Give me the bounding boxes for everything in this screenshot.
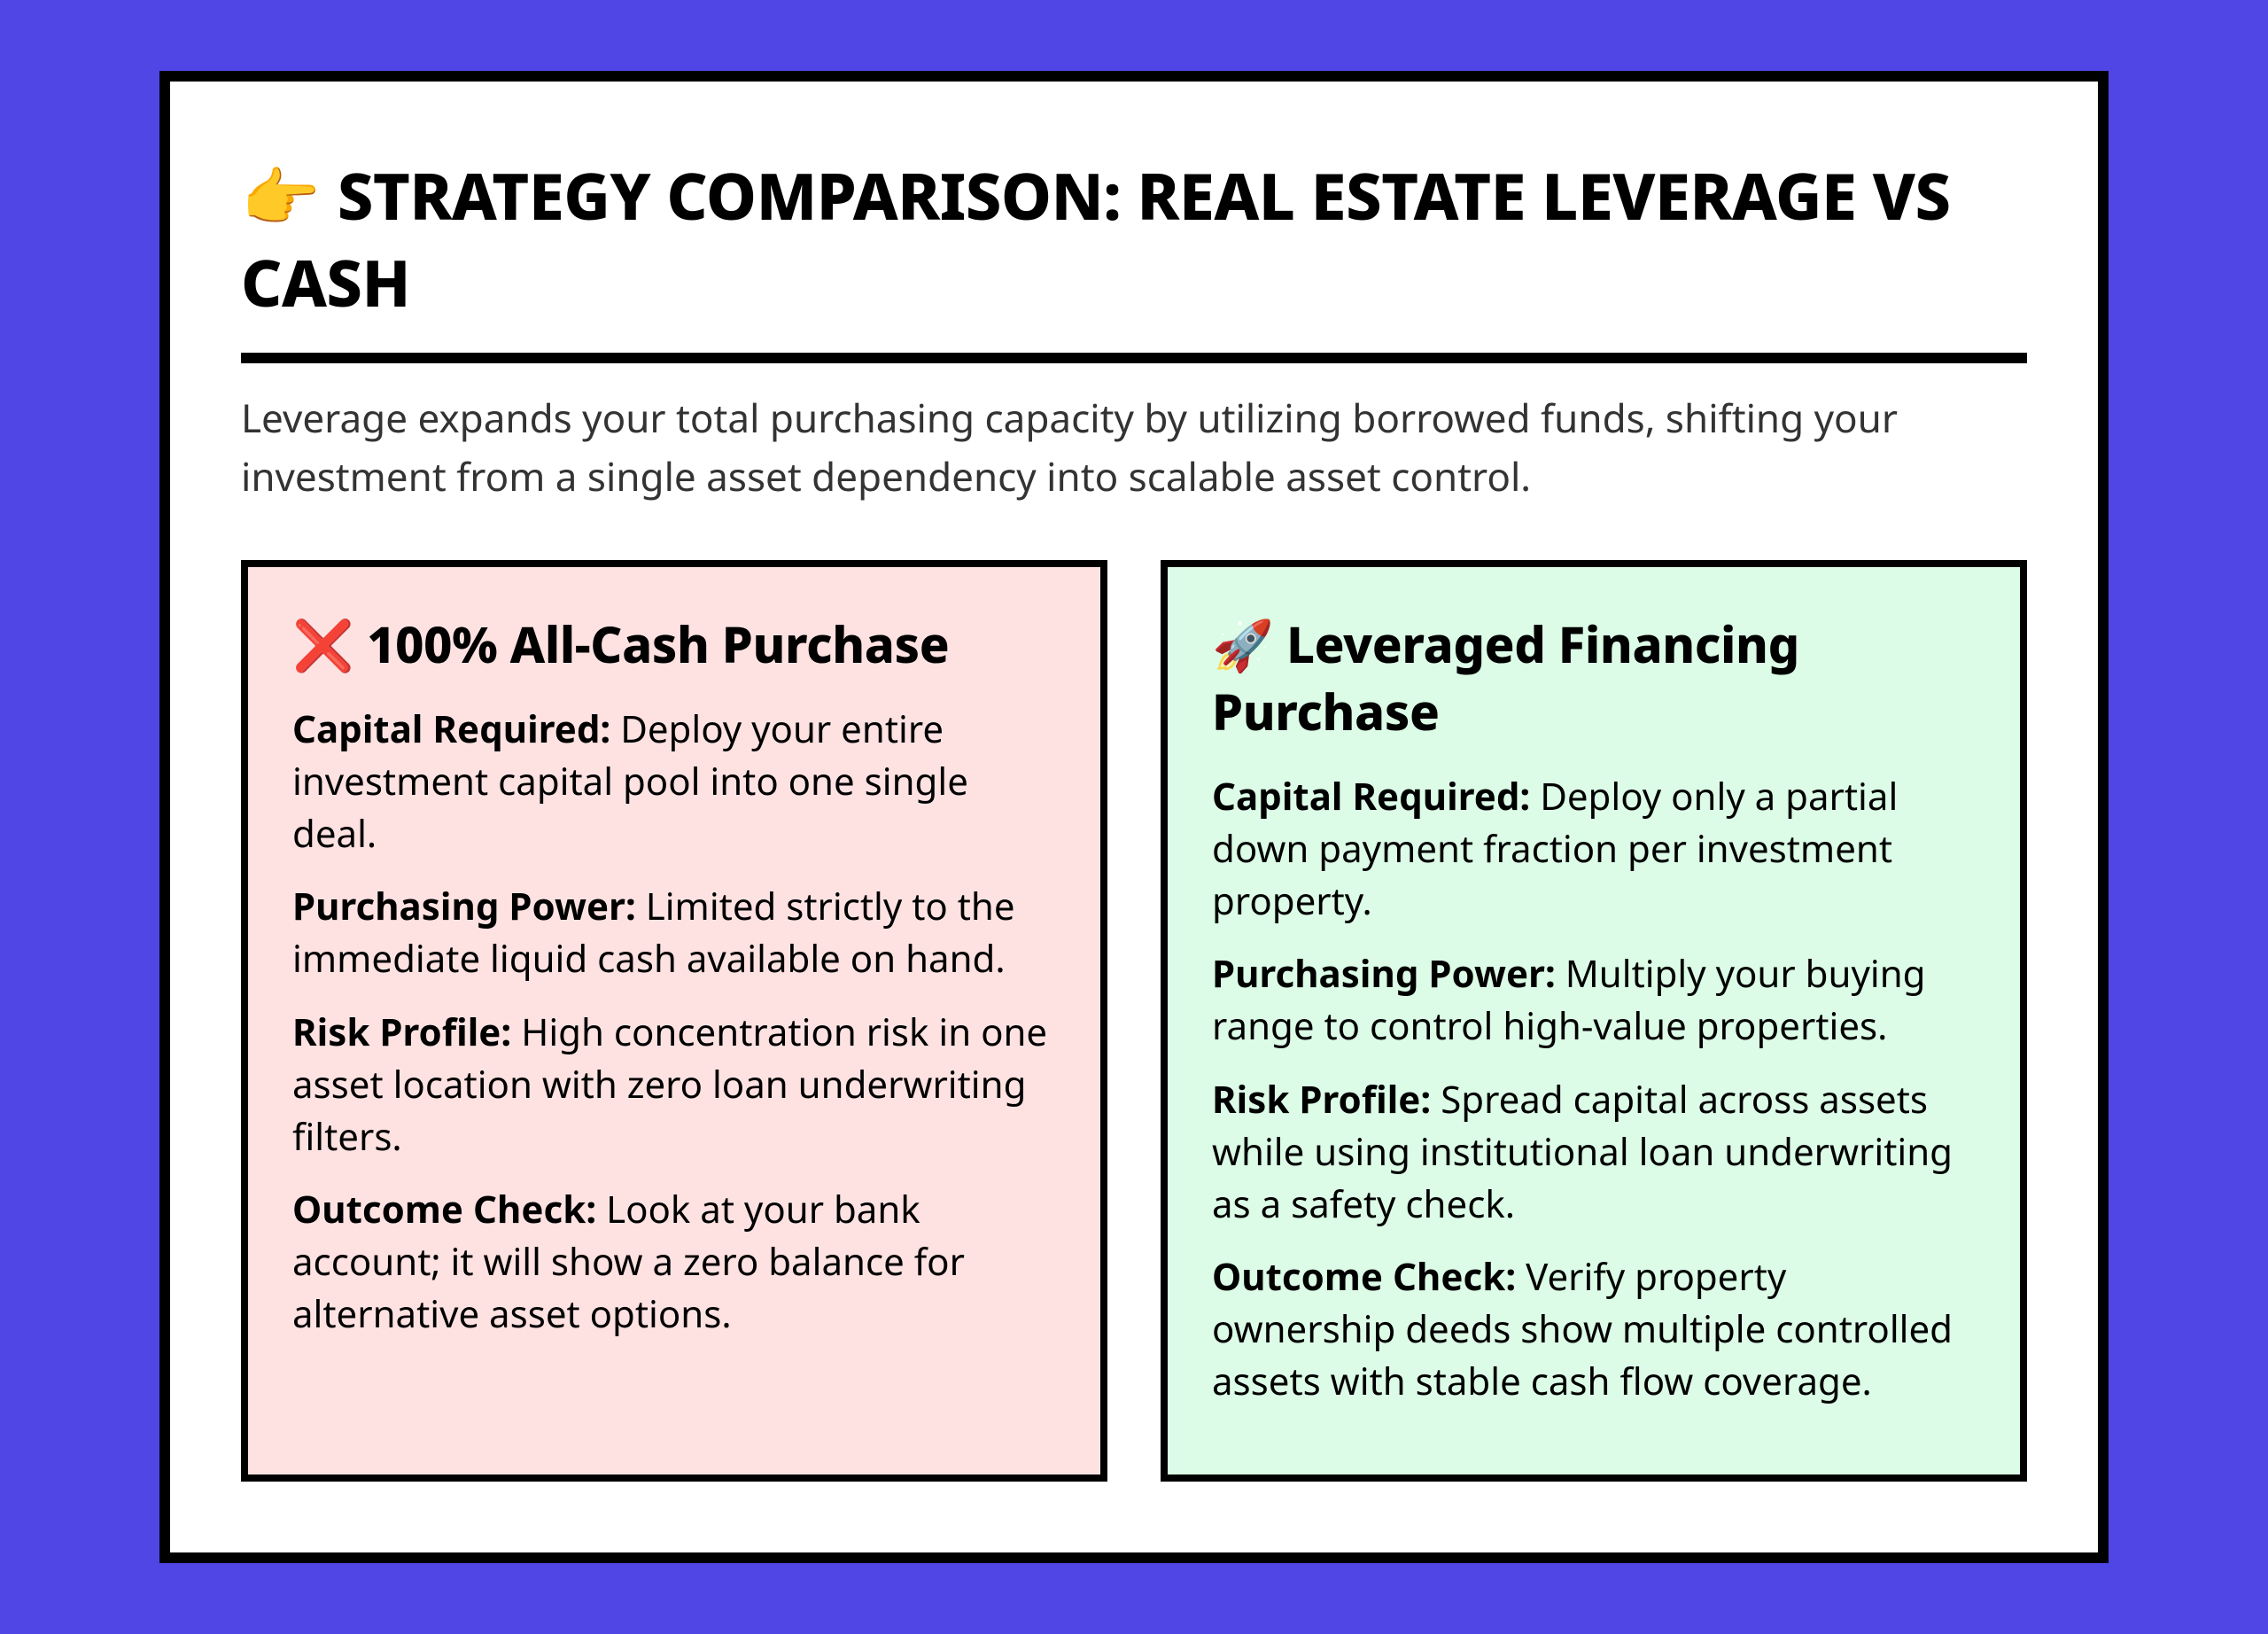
panel heading: leveraged: Purchase	[1212, 678, 1440, 745]
capital required: all-cash	[292, 704, 968, 859]
outcome check: all-cash: Outcome Check: Look at your bank	[292, 1184, 920, 1234]
intro text	[241, 391, 1898, 502]
risk profile: leveraged: Risk Profile: Spread capital across assets	[1212, 1074, 1928, 1124]
risk profile: leveraged: as a safety check.	[1212, 1179, 1515, 1229]
capital required: all-cash: deal.	[292, 808, 377, 859]
risk profile: all-cash: Risk Profile: High concentration risk in one	[292, 1007, 1047, 1057]
purchasing power: all-cash: immediate liquid cash available on hand.	[292, 933, 1006, 984]
panel heading: all-cash: ❌ 100% All-Cash Purchase	[292, 611, 949, 678]
capital required: leveraged: property.	[1212, 875, 1372, 926]
purchasing power: all-cash: Purchasing Power: Limited strictly to the	[292, 881, 1015, 931]
panel: all-cash purchase	[241, 560, 1107, 1482]
panel: leveraged financing purchase	[1161, 560, 2027, 1482]
capital required: all-cash: investment capital pool into one single	[292, 756, 968, 806]
risk profile: leveraged: while using institutional loan underwriting	[1212, 1126, 1953, 1177]
outcome check: all-cash: account; it will show a zero balance for	[292, 1236, 965, 1287]
outcome check: leveraged: ownership deeds show multiple controlled	[1212, 1303, 1953, 1354]
risk profile: all-cash: filters.	[292, 1111, 402, 1162]
panel heading: leveraged	[1212, 611, 1799, 745]
outcome check: leveraged	[1212, 1251, 1953, 1406]
capital required: leveraged: Capital Required: Deploy only a partial	[1212, 771, 1898, 821]
purchasing power: leveraged: Purchasing Power: Multiply your buying	[1212, 948, 1926, 999]
title: 👉 STRATEGY COMPARISON: REAL ESTATE LEVERAGE VS	[241, 152, 1951, 239]
outcome check: leveraged: assets with stable cash flow coverage.	[1212, 1356, 1872, 1406]
title rule	[241, 353, 2027, 363]
capital required: leveraged: down payment fraction per investment	[1212, 823, 1892, 874]
risk profile: all-cash: asset location with zero loan underwriting	[292, 1059, 1026, 1109]
outcome check: all-cash: alternative asset options.	[292, 1288, 732, 1339]
intro text: investment from a single asset dependency into scalable asset control.	[241, 449, 1531, 502]
capital required: all-cash: Capital Required: Deploy your entire	[292, 704, 944, 754]
purchasing power: leveraged	[1212, 948, 1926, 1051]
risk profile: all-cash	[292, 1007, 1047, 1162]
purchasing power: leveraged: range to control high-value properties.	[1212, 1000, 1887, 1051]
intro text: Leverage expands your total purchasing capacity by utilizing borrowed funds, shifting your	[241, 391, 1898, 444]
purchasing power: all-cash	[292, 881, 1015, 984]
capital required: leveraged	[1212, 771, 1898, 926]
panel heading: leveraged: 🚀 Leveraged Financing	[1212, 611, 1799, 678]
card frame	[159, 71, 2109, 1563]
outcome check: all-cash	[292, 1184, 965, 1339]
title: CASH	[241, 239, 410, 326]
risk profile: leveraged	[1212, 1074, 1953, 1229]
title	[241, 152, 1951, 326]
outcome check: leveraged: Outcome Check: Verify property	[1212, 1251, 1786, 1302]
